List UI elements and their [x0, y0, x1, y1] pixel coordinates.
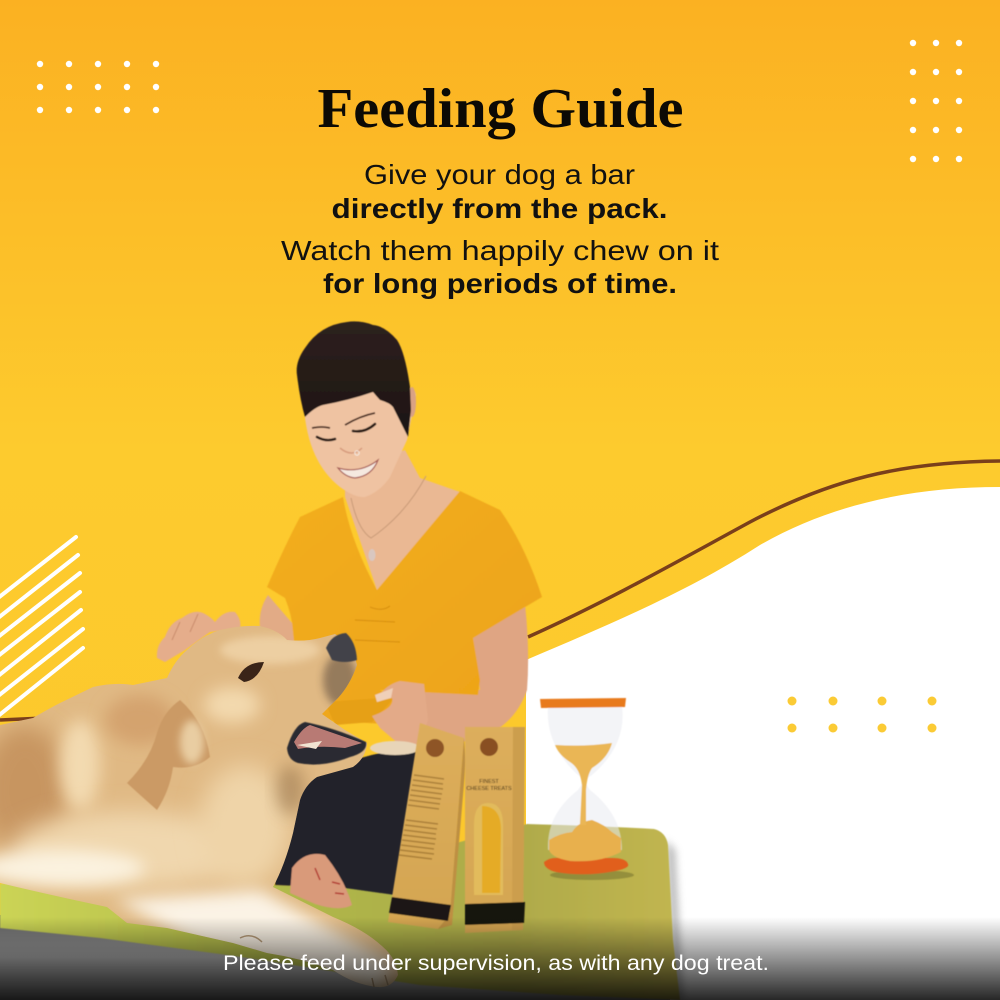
hourglass: top cap	[540, 698, 626, 708]
woman: neck and chest	[345, 450, 460, 590]
decorative dots: lower right	[788, 696, 936, 732]
dog	[0, 620, 400, 990]
instructions text: Watch them happily chew on it	[281, 235, 719, 266]
woman: eyes	[317, 424, 375, 440]
decorative dots: top right	[910, 40, 962, 162]
woman: legs	[275, 752, 425, 895]
woman: necklace	[351, 476, 426, 538]
hourglass: shadow	[550, 870, 634, 880]
woman	[157, 321, 542, 908]
hourglass	[540, 698, 634, 880]
bottom shadow gradient	[0, 917, 1000, 1000]
product box: text lines	[399, 775, 444, 859]
woman: hand holding treat	[372, 681, 428, 745]
instructions text	[281, 159, 719, 299]
dog: body	[0, 620, 400, 990]
woman: hair	[297, 321, 411, 437]
dog: ear	[127, 700, 210, 810]
dog: nose	[326, 633, 357, 662]
fur behind hand	[370, 741, 420, 755]
dog: mouth	[287, 722, 366, 765]
product box: front	[465, 727, 525, 933]
dog: paw toes	[240, 936, 388, 987]
mat shadow	[666, 840, 683, 1000]
woman: foot	[290, 854, 352, 908]
product box: front: CHEESE TREATS	[466, 786, 512, 792]
floor under mat	[0, 915, 670, 1000]
product box: label text: FINEST	[479, 779, 499, 785]
woman: nose ring	[355, 451, 359, 455]
curved brown line	[0, 461, 1000, 720]
woman: smile	[338, 460, 378, 478]
hourglass: sand pile	[549, 820, 621, 861]
dog: eye	[238, 662, 264, 682]
instructions text: Give your dog a bar	[364, 159, 635, 190]
decorative white stripes	[0, 537, 83, 716]
woman: nose shade	[340, 448, 362, 453]
product box: back	[388, 723, 466, 929]
supervision note: Please feed under supervision, as with any dog treat.	[223, 952, 769, 975]
product box: window with bar	[474, 803, 503, 895]
decorative dots: top left	[37, 61, 159, 113]
yoga mat	[0, 824, 680, 1000]
woman: face	[304, 380, 416, 497]
woman: petting hand	[157, 612, 240, 662]
woman: arms	[260, 595, 298, 650]
white wave panel	[526, 487, 1000, 1000]
woman: shirt	[267, 491, 542, 724]
product box: black band	[465, 902, 525, 925]
hourglass: upper sand and stream	[555, 743, 612, 825]
instructions text: directly from the pack.	[332, 193, 668, 224]
instructions text: for long periods of time.	[323, 268, 677, 299]
hourglass: base	[544, 858, 628, 874]
title: Feeding Guide	[318, 78, 684, 140]
hourglass: glass	[548, 706, 623, 850]
